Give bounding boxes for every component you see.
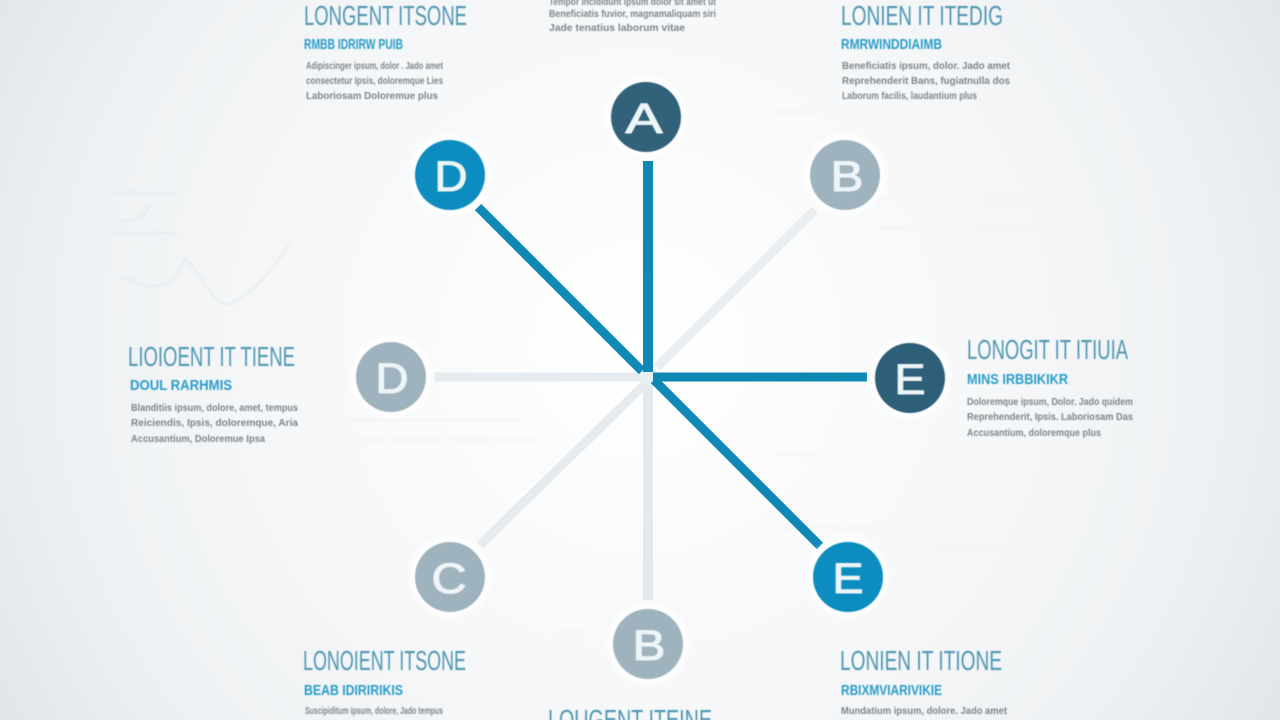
faint background line chart bbox=[112, 112, 1065, 632]
spoke to A top (active) bbox=[643, 161, 653, 372]
subheading: BEAB IDIRIRIKIS bbox=[304, 682, 403, 699]
body text: Blanditiis ipsum, dolore, amet, tempus bbox=[131, 402, 298, 414]
node E blue: E bbox=[832, 555, 864, 603]
body text: consectetur Ipsis, doloremque Lies bbox=[306, 75, 443, 87]
text block: bottom left bbox=[303, 645, 466, 717]
body text bbox=[842, 60, 1010, 102]
node C: C bbox=[432, 555, 466, 603]
spoke to B upper right (inactive) bbox=[657, 210, 815, 367]
body text: Beneficiatis ipsum, dolor. Jado amet bbox=[842, 60, 1010, 72]
body text bbox=[131, 402, 298, 445]
node E blue bbox=[808, 537, 888, 617]
text block: top right bbox=[841, 0, 1010, 102]
node A bbox=[606, 77, 686, 157]
heading: LIOIOENT IT TIENE bbox=[128, 341, 295, 372]
spoke to E lower right (active) bbox=[654, 380, 820, 546]
node D grey bbox=[351, 337, 431, 417]
node E dark: E bbox=[894, 356, 926, 404]
subheading: RMBB IDRIRW PUIB bbox=[304, 36, 403, 53]
subheading: RMRWINDDIAIMB bbox=[841, 36, 942, 53]
node A: A bbox=[626, 95, 663, 143]
node C bbox=[410, 537, 490, 617]
text block: top centre: Jade tenatius laborum vitae bbox=[549, 22, 685, 34]
body text: Laboriosam Doloremue plus bbox=[306, 90, 438, 102]
node D grey: D bbox=[376, 355, 408, 403]
spoke to D left (inactive) bbox=[435, 372, 640, 382]
body text bbox=[967, 396, 1133, 439]
body text: Mundatium ipsum, dolore. Jado amet bbox=[841, 705, 1007, 717]
heading: LONOIENT ITSONE bbox=[303, 645, 466, 676]
node B bottom: B bbox=[632, 622, 666, 670]
spoke to D upper left (active) bbox=[478, 207, 642, 371]
body text: Reiciendis, Ipsis, doloremque, Aria bbox=[131, 417, 298, 429]
text block: bottom right bbox=[840, 645, 1007, 717]
text block: top left bbox=[304, 0, 467, 102]
text block: right bbox=[967, 334, 1133, 439]
body text: Suscipiditum ipsum, dolore, Jado tempus bbox=[305, 705, 443, 717]
node B upper right: B bbox=[830, 153, 864, 201]
body text: Doloremque ipsum, Dolor. Jado quidem bbox=[967, 396, 1133, 408]
body text: Accusantium, doloremque plus bbox=[967, 427, 1101, 439]
hub spokes bbox=[435, 161, 867, 600]
node D blue bbox=[410, 135, 490, 215]
body text: Reprehenderit Bans, fugiatnulla dos bbox=[842, 75, 1010, 87]
spoke to B bottom (inactive) bbox=[643, 385, 653, 600]
subheading: RBIXMVIARIVIKIE bbox=[841, 682, 942, 699]
heading: LONIEN IT ITEDIG bbox=[841, 0, 1003, 31]
body text bbox=[306, 60, 443, 102]
heading: LONOGIT IT ITIUIA bbox=[967, 334, 1128, 365]
body text: Adipiscinger ipsum, dolor . Jado amet bbox=[306, 60, 443, 72]
spoke to C lower left (inactive) bbox=[480, 384, 645, 545]
subheading: DOUL RARHMIS bbox=[130, 377, 232, 394]
body text: Laborum facilis, laudantium plus bbox=[842, 90, 977, 102]
body text: Accusantium, Doloremue Ipsa bbox=[131, 433, 265, 445]
hub centre bbox=[638, 367, 658, 387]
subheading: MINS IRBBIKIKR bbox=[967, 371, 1068, 388]
node D blue: D bbox=[434, 153, 468, 201]
text block: top centre bbox=[549, 0, 716, 34]
heading: LONIEN IT ITIONE bbox=[840, 645, 1002, 676]
node B upper right bbox=[805, 135, 885, 215]
text block: left bbox=[128, 341, 298, 445]
node B bottom bbox=[608, 604, 688, 684]
spoke to E right (active) bbox=[653, 372, 867, 382]
text block: top centre: Beneficiatis fuvior, magnamaliquam siri bbox=[549, 8, 716, 20]
body text: Reprehenderit, Ipsis. Laboriosam Das bbox=[967, 411, 1133, 423]
node E dark bbox=[870, 338, 950, 418]
heading: LONGENT ITSONE bbox=[304, 0, 467, 31]
